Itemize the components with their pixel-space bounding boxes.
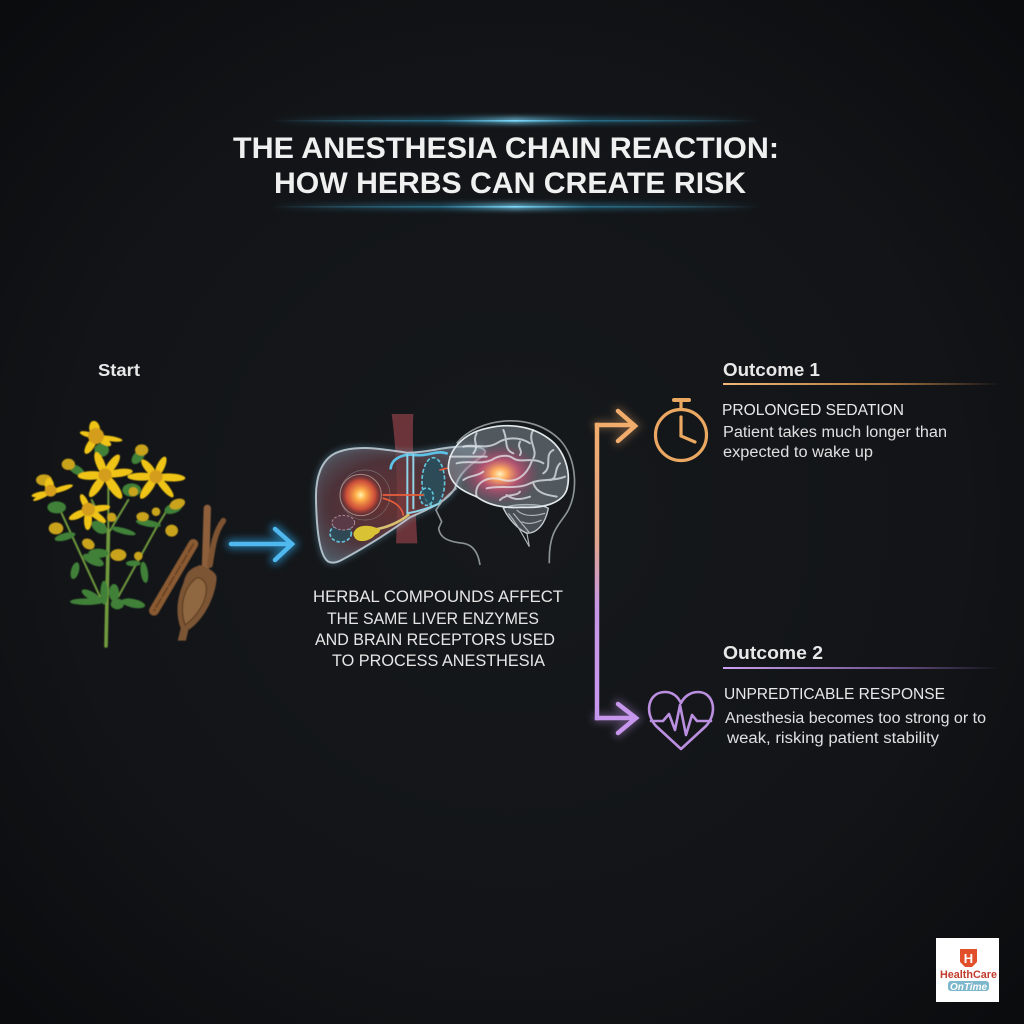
title block: THE ANESTHESIA CHAIN REACTION: <box>233 132 779 165</box>
outcome 1: Patient takes much longer than <box>723 424 947 441</box>
center description: AND BRAIN RECEPTORS USED <box>315 631 555 649</box>
gallbladder <box>353 526 380 541</box>
logo: HealthCare OnTime: OnTime <box>950 982 987 993</box>
outcome 2: UNPREDTICABLE RESPONSE <box>724 686 945 703</box>
logo: HealthCare OnTime <box>936 938 999 1002</box>
liver halo <box>316 446 485 563</box>
center description: HERBAL COMPOUNDS AFFECT <box>313 588 563 606</box>
outcome 2: weak, risking patient stability <box>726 730 939 747</box>
outcome 1 <box>656 360 1000 461</box>
center description: TO PROCESS ANESTHESIA <box>332 652 545 670</box>
petals <box>31 420 186 530</box>
cerebellum <box>503 505 548 533</box>
title block: HOW HERBS CAN CREATE RISK <box>274 167 747 200</box>
ducts <box>372 452 447 530</box>
logo mark <box>960 949 977 967</box>
branching arrow <box>597 411 636 733</box>
outcome 1: PROLONGED SEDATION <box>722 402 904 419</box>
logo: HealthCare OnTime: HealthCare <box>940 969 997 981</box>
brain glow <box>460 444 540 504</box>
center description <box>313 588 563 670</box>
illustration: herb flowers and root <box>31 420 223 646</box>
outcome 1: expected to wake up <box>723 444 873 461</box>
buds <box>36 444 187 561</box>
center description: THE SAME LIVER ENZYMES <box>327 610 539 628</box>
outcome 1: Outcome 1 <box>723 360 820 380</box>
outcome 2: Outcome 2 <box>723 643 823 663</box>
brain <box>448 426 568 508</box>
brain folds <box>450 430 565 500</box>
liver hot spot <box>340 474 381 516</box>
icon: heart with pulse <box>649 692 713 749</box>
blood vessel <box>392 414 417 543</box>
root sticks <box>154 508 223 611</box>
arrow: herb to body <box>231 529 292 560</box>
liver <box>316 446 485 563</box>
logo: HealthCare OnTime: H <box>964 951 973 966</box>
stems and leaves <box>47 443 184 646</box>
root tuber <box>177 565 217 641</box>
enzyme clusters <box>330 458 445 542</box>
icon: stopwatch <box>656 400 706 460</box>
start label: Start <box>98 360 140 380</box>
outcome 2 <box>649 643 1000 749</box>
outcome 2: Anesthesia becomes too strong or to <box>725 710 986 727</box>
head silhouette <box>436 421 575 565</box>
flower centres <box>45 428 163 516</box>
illustration: liver and brain <box>316 414 575 565</box>
title block <box>233 118 779 209</box>
